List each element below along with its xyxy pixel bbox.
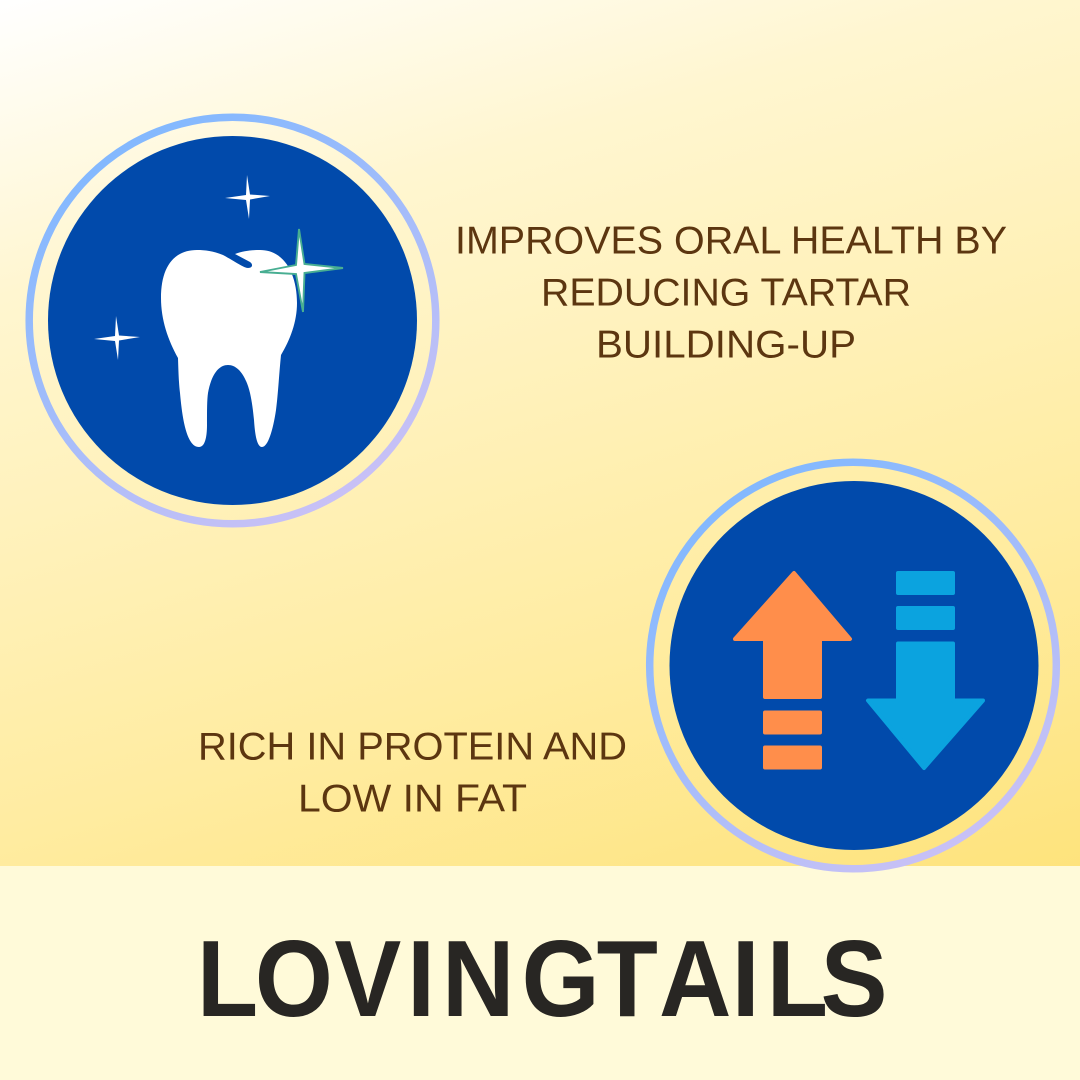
- icon: tooth: [161, 250, 297, 447]
- text: oral health benefit: BUILDING-UP: [596, 324, 856, 366]
- icon: tooth badge: [29, 117, 436, 524]
- text: protein benefit: [198, 726, 627, 820]
- text: oral health benefit: IMPROVES ORAL HEALTH BY: [455, 220, 1007, 262]
- icon: blue down arrow: [868, 573, 983, 768]
- text: oral health benefit: [455, 220, 1007, 366]
- icon: large sparkle: [260, 229, 343, 312]
- icon: orange up arrow: [735, 573, 850, 768]
- icon: protein and fat arrows badge: [650, 462, 1056, 869]
- text: protein benefit: LOW IN FAT: [298, 778, 527, 820]
- text: oral health benefit: REDUCING TARTAR: [541, 272, 911, 314]
- icon: left sparkle: [94, 316, 140, 360]
- text: protein benefit: RICH IN PROTEIN AND: [198, 726, 627, 768]
- icon: top sparkle: [225, 175, 270, 219]
- title: brand name: LOVINGTAILS: [197, 918, 888, 1040]
- footer band: [0, 866, 1080, 1080]
